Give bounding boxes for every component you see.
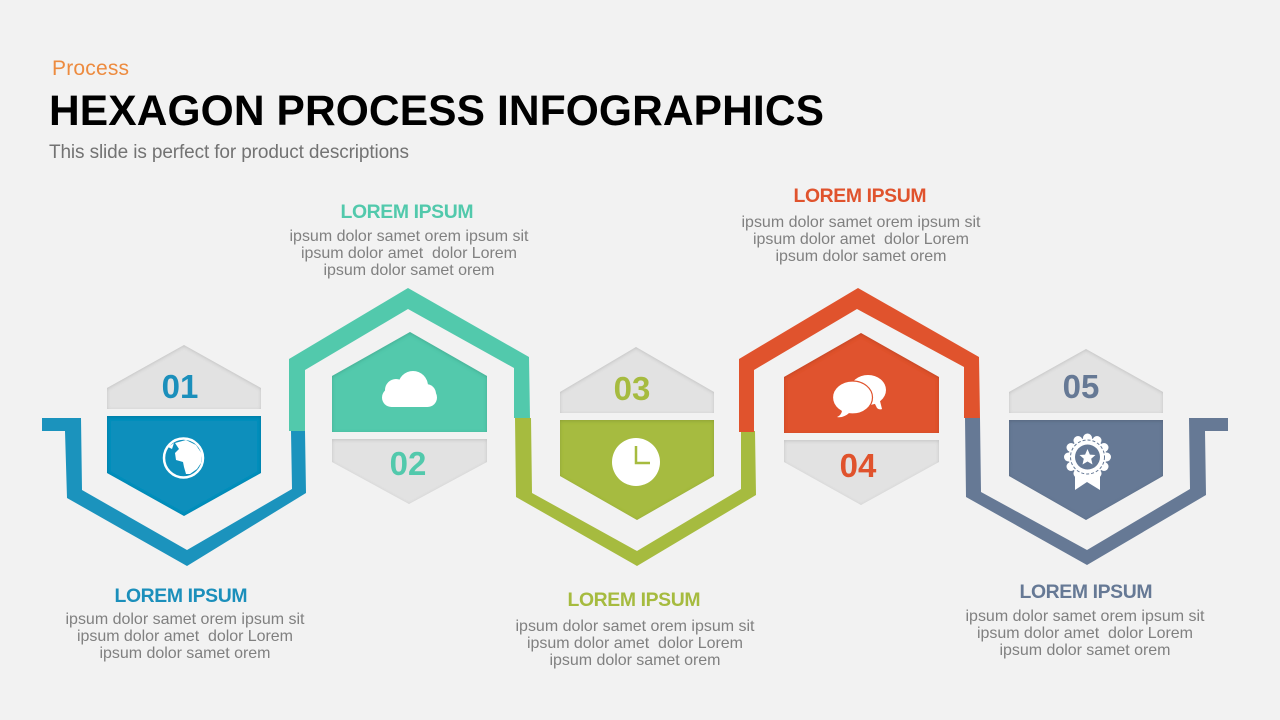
title: HEXAGON PROCESS INFOGRAPHICS — [49, 88, 824, 135]
number panel 05 — [1009, 349, 1163, 413]
text block 02: LOREM IPSUM — [340, 201, 474, 223]
icon: award ribbon — [1064, 434, 1111, 490]
text block 03: ipsum dolor amet dolor Lorem — [527, 635, 743, 652]
text block 05: ipsum dolor samet orem ipsum sit — [966, 608, 1205, 625]
text block 02: ipsum dolor amet dolor Lorem — [301, 245, 517, 262]
number panel 04 — [784, 440, 939, 505]
text block 05: ipsum dolor samet orem — [1000, 642, 1170, 659]
eyebrow: Process: Process — [52, 57, 129, 80]
text block 02: ipsum dolor samet orem — [324, 262, 494, 279]
text block 02: ipsum dolor samet orem ipsum sit — [290, 228, 529, 245]
subtitle: This slide is perfect for product descriptions — [49, 142, 409, 163]
step 04 hexagon — [784, 333, 939, 505]
number 03: 03 — [614, 370, 650, 407]
text block 02 — [290, 201, 529, 279]
text block 04 — [742, 185, 981, 265]
text block 04: ipsum dolor samet orem ipsum sit — [742, 214, 981, 231]
connector: orange — [739, 288, 980, 432]
icon panel 04 — [784, 333, 939, 433]
number panel 01 — [107, 345, 261, 409]
text block 05 — [966, 581, 1205, 659]
number 02: 02 — [390, 445, 426, 482]
text block 03: ipsum dolor samet orem ipsum sit — [516, 618, 755, 635]
text block 01 — [66, 585, 305, 662]
step 05 hexagon — [1009, 349, 1163, 520]
icon: speech bubbles — [832, 375, 886, 417]
text block 04: LOREM IPSUM — [794, 185, 926, 207]
connector: green — [515, 418, 756, 566]
number 04: 04 — [840, 447, 877, 484]
step 02 hexagon — [332, 332, 487, 504]
icon: clock — [612, 438, 660, 486]
icon panel 01 — [107, 416, 261, 516]
step 01 hexagon — [107, 345, 261, 516]
step 03 hexagon — [560, 347, 714, 520]
icon: cloud — [382, 371, 437, 407]
text block 03: ipsum dolor samet orem — [550, 652, 720, 669]
number panel 03 — [560, 347, 714, 413]
connector: slate — [965, 418, 1228, 565]
text block 01: ipsum dolor samet orem ipsum sit — [66, 611, 305, 628]
icon panel 03 — [560, 420, 714, 520]
text block 03 — [516, 589, 755, 669]
icon panel 05 — [1009, 420, 1163, 520]
number 05: 05 — [1063, 368, 1099, 405]
text block 05: ipsum dolor amet dolor Lorem — [977, 625, 1193, 642]
icon: globe — [164, 438, 203, 478]
text block 01: LOREM IPSUM — [114, 585, 248, 607]
text block 01: ipsum dolor samet orem — [100, 645, 270, 662]
connector: teal — [289, 288, 530, 431]
number 01: 01 — [162, 368, 198, 405]
icon panel 02 — [332, 332, 487, 432]
text block 04: ipsum dolor samet orem — [776, 248, 946, 265]
text block 05: LOREM IPSUM — [1020, 581, 1152, 603]
connector: blue — [42, 418, 306, 566]
text block 03: LOREM IPSUM — [568, 589, 700, 611]
text block 01: ipsum dolor amet dolor Lorem — [77, 628, 293, 645]
number panel 02 — [332, 439, 487, 504]
text block 04: ipsum dolor amet dolor Lorem — [753, 231, 969, 248]
